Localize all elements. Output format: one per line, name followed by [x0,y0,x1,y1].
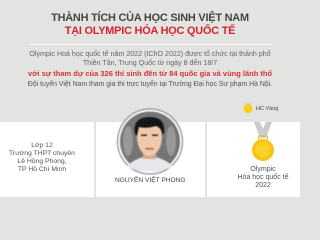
panel: student [96,122,205,197]
intro text [29,50,271,66]
divider [30,44,272,45]
medal caption: Olympic [250,166,276,173]
panel: medal [207,122,300,197]
school text: TP Hồ Chí Minh [18,166,66,173]
medal caption: 2022 [255,182,271,189]
title [51,11,249,36]
medal caption: Hóa học quốc tế [238,174,288,181]
medal caption [238,166,288,189]
school text: Lớp 12 [31,142,53,149]
icon: medal [252,122,274,161]
school text: Lê Hồng Phong, [17,158,67,165]
legend icon [243,102,253,114]
school text [9,142,75,173]
student name: NGUYỄN VIỆT PHONG [115,177,186,184]
panel: school [0,122,94,197]
highlight text: với sự tham dự của 326 thí sinh đến từ 84 quốc gia và vùng lãnh thổ [28,69,272,78]
team text: Đội tuyển Việt Nam tham gia thi trực tuyến tại Trường Đại học Sư phạm Hà Nội. [28,80,272,88]
portrait [116,108,184,176]
school text: Trường THPT chuyên [9,150,75,157]
intro text: Olympic Hoá học quốc tế năm 2022 (IChO 2022) được tổ chức tại thành phố [29,50,271,58]
title: THÀNH TÍCH CỦA HỌC SINH VIỆT NAM [51,12,249,24]
legend label: HC Vàng [256,106,278,112]
title: TẠI OLYMPIC HÓA HỌC QUỐC TẾ [65,24,235,36]
intro text: Thiên Tân, Trung Quốc từ ngày 8 đến 18/7 [83,58,217,66]
legend: gold medal [243,102,278,114]
